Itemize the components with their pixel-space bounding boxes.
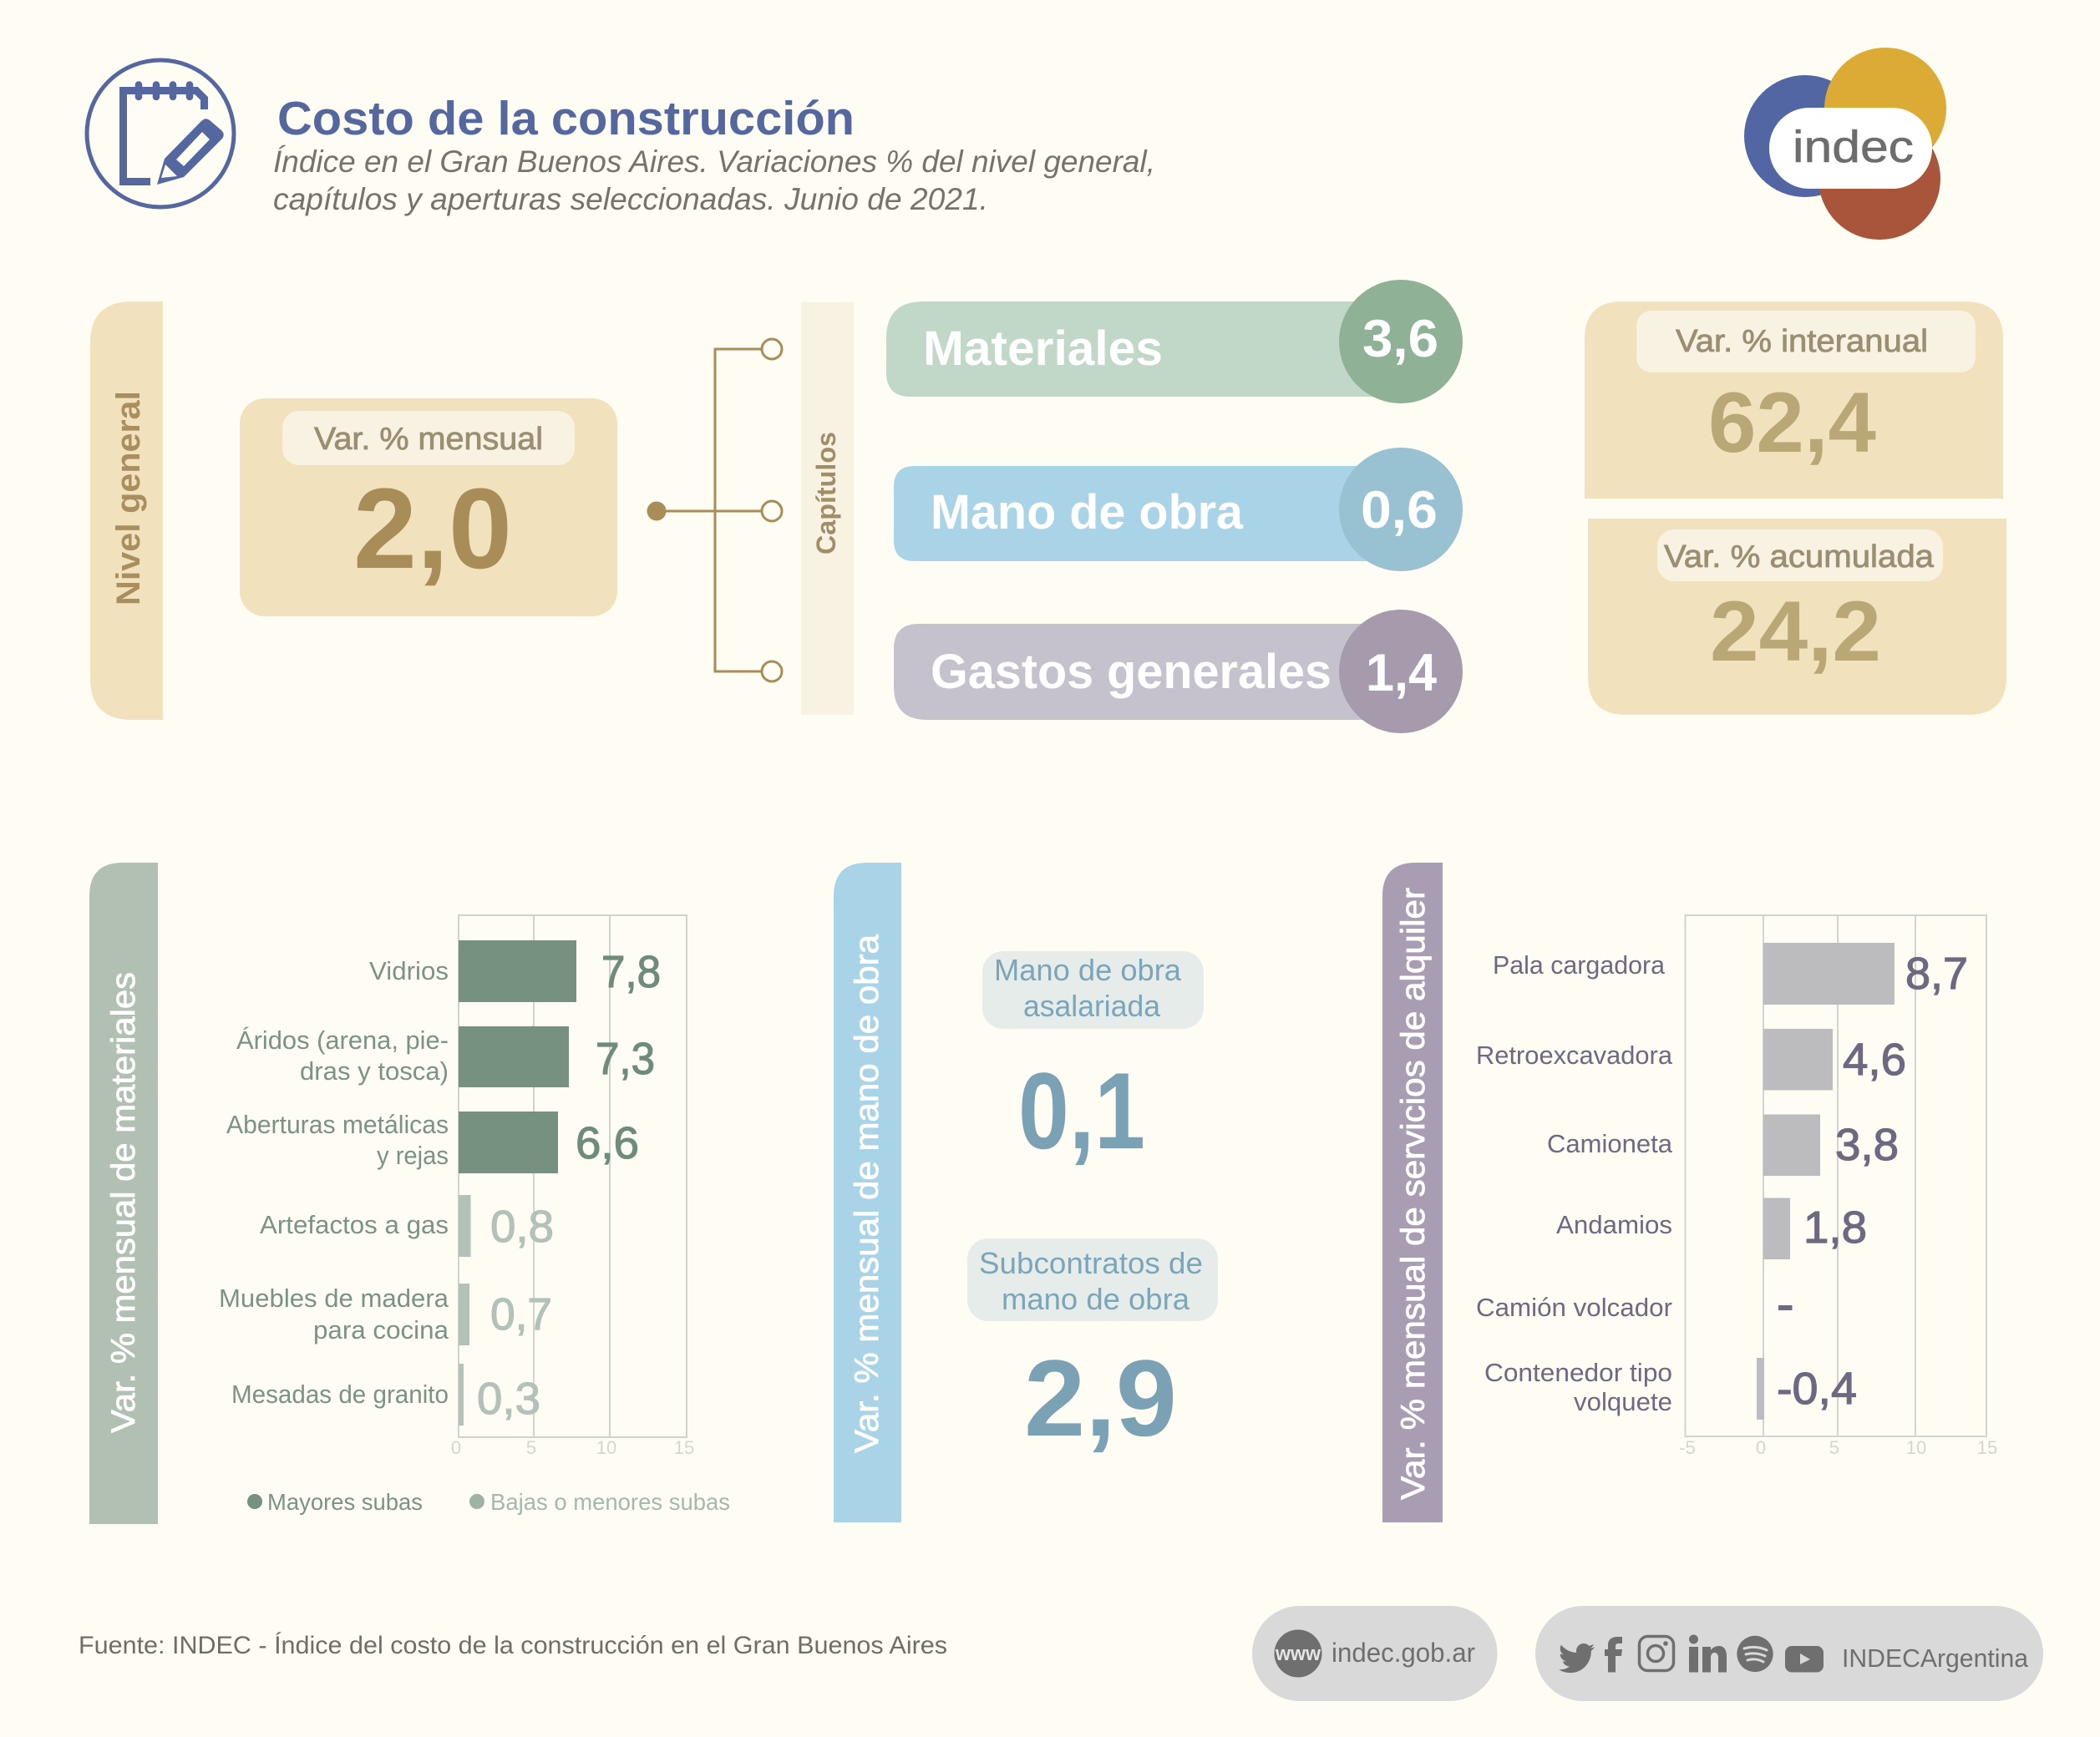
category labels: Mesadas de granito: [231, 1380, 449, 1409]
callout: subcontratos de mano de obra: Subcontratos de: [979, 1246, 1203, 1280]
legend: Mayores subas: [267, 1489, 423, 1515]
heading: nivel general: Nivel general: [110, 391, 147, 605]
connector: [647, 339, 782, 681]
heading: var mano de obra: Var. % mensual de mano de obra: [849, 934, 885, 1453]
chapter: materiales: [886, 280, 1463, 403]
values: [477, 947, 661, 1424]
category labels: [1476, 951, 1672, 1416]
axis labels: 5: [526, 1437, 536, 1458]
values: 0,7: [490, 1289, 552, 1339]
values: -0,4: [1777, 1364, 1857, 1414]
category labels: Camioneta: [1547, 1130, 1672, 1158]
icon: facebook: [1605, 1637, 1622, 1672]
chapter: materiales: 3,6: [1362, 310, 1438, 368]
category labels: Artefactos a gas: [260, 1210, 449, 1239]
social pill: INDECArgentina: [1842, 1643, 2029, 1673]
website pill: indec.gob.ar: [1332, 1638, 1475, 1668]
category labels: Camión volcador: [1476, 1294, 1672, 1322]
chapter: gastos generales: Gastos generales: [931, 645, 1332, 699]
chapter: mano de obra: [894, 448, 1463, 571]
values: 0,3: [477, 1374, 540, 1424]
chart: materiales: [219, 915, 694, 1458]
label: var interanual: Var. % interanual: [1676, 324, 1928, 359]
category labels: Retroexcavadora: [1476, 1041, 1672, 1070]
heading: capitulos: Capítulos: [811, 432, 841, 555]
panel: mano de obra tab: [834, 863, 901, 1522]
value: 2,0: 2,0: [353, 465, 512, 593]
source note: Fuente: INDEC - Índice del costo de la construcción en el Gran Buenos Aires: [79, 1632, 947, 1659]
value: 0,1: 0,1: [1018, 1050, 1145, 1172]
axis labels: 15: [674, 1437, 694, 1458]
subtitle: capítulos y aperturas seleccionadas. Junio de 2021.: [273, 182, 988, 216]
grid: [1686, 915, 1986, 1436]
axis labels: [451, 1437, 694, 1458]
website pill: [1252, 1606, 1497, 1701]
values: 7,3: [596, 1034, 655, 1084]
category labels: [219, 956, 449, 1409]
values: 4,6: [1843, 1035, 1906, 1085]
category labels: para cocina: [313, 1315, 449, 1345]
category labels: dras y tosca): [300, 1056, 449, 1086]
category labels: Andamios: [1556, 1211, 1672, 1239]
heading: var servicios de alquiler: Var. % mensual de servicios de alquiler: [1395, 888, 1432, 1500]
callout: mano de obra asalariada: asalariada: [1023, 989, 1161, 1023]
panel: var acumulada: [1588, 519, 2006, 715]
panel: var interanual: [1585, 301, 2003, 499]
values: [1777, 949, 1968, 1414]
icon: www: www: [1275, 1643, 1321, 1665]
axis labels: 0: [1756, 1437, 1766, 1458]
category labels: Aberturas metálicas: [226, 1110, 449, 1139]
title: Costo de la construcción: [277, 92, 855, 145]
chapter: gastos generales: [894, 610, 1463, 733]
icon: instagram: [1639, 1637, 1674, 1670]
category labels: Pala cargadora: [1493, 951, 1665, 980]
category labels: volquete: [1574, 1388, 1672, 1416]
value: 2,9: 2,9: [1024, 1337, 1177, 1459]
category labels: Contenedor tipo: [1484, 1359, 1672, 1387]
axis labels: 0: [451, 1437, 461, 1458]
axis labels: 15: [1977, 1437, 1997, 1458]
subtitle: Índice en el Gran Buenos Aires. Variaciones % del nivel general,: [273, 144, 1155, 179]
category labels: Muebles de madera: [219, 1284, 449, 1313]
icon: youtube: [1785, 1646, 1824, 1672]
label: var mensual: Var. % mensual: [314, 422, 543, 457]
axis labels: 5: [1829, 1437, 1839, 1458]
chart: servicios de alquiler: [1476, 915, 1997, 1458]
bars: [459, 940, 576, 1426]
callout: subcontratos de mano de obra: mano de obra: [1002, 1282, 1190, 1316]
icon: spotify: [1737, 1636, 1773, 1672]
values: 3,8: [1835, 1120, 1899, 1170]
header: [87, 60, 1155, 216]
heading: var materiales: Var. % mensual de materiales: [105, 972, 142, 1433]
value: 24,2: 24,2: [1710, 584, 1881, 679]
axis labels: 10: [1906, 1437, 1926, 1458]
axis labels: -5: [1679, 1437, 1696, 1458]
category labels: Vidrios: [369, 956, 449, 985]
icon: linkedin: [1689, 1635, 1727, 1672]
category labels: y rejas: [377, 1141, 449, 1170]
panel: servicios de alquiler tab: [1382, 863, 1443, 1522]
chapter: materiales: Materiales: [923, 322, 1163, 376]
legend: Bajas o menores subas: [490, 1489, 730, 1515]
logo: indec: [1744, 48, 1946, 240]
values: 1,8: [1803, 1203, 1867, 1253]
logo: indec: indec: [1793, 122, 1914, 172]
icon: notebook and pencil: [87, 60, 234, 207]
panel: materiales tab: [89, 863, 158, 1524]
panel: nivel general tab: [90, 301, 163, 720]
panel: capitulos tab: [801, 302, 854, 715]
chapter: mano de obra: Mano de obra: [931, 485, 1244, 539]
label: var acumulada: Var. % acumulada: [1664, 539, 1935, 575]
social pill: [1535, 1606, 2043, 1701]
bars: [1757, 943, 1895, 1420]
values: 8,7: [1905, 949, 1968, 999]
value: 62,4: 62,4: [1708, 375, 1876, 470]
callout: subcontratos de mano de obra: [967, 1238, 1218, 1321]
legend: [247, 1489, 730, 1515]
icon: twitter: [1559, 1643, 1595, 1673]
axis labels: [1679, 1437, 1997, 1458]
icon: www: [1275, 1630, 1321, 1677]
values: 7,8: [601, 947, 661, 997]
callout: mano de obra asalariada: [982, 951, 1204, 1029]
chapter: mano de obra: 0,6: [1361, 481, 1438, 539]
values: 6,6: [576, 1118, 639, 1168]
category labels: Áridos (arena, pie-: [236, 1025, 449, 1055]
callout: mano de obra asalariada: Mano de obra: [994, 953, 1182, 987]
grid: [459, 915, 687, 1437]
values: 0,8: [490, 1202, 554, 1252]
panel: var mensual: [240, 398, 617, 616]
axis labels: 10: [596, 1437, 616, 1458]
chapter: gastos generales: 1,4: [1366, 644, 1437, 702]
